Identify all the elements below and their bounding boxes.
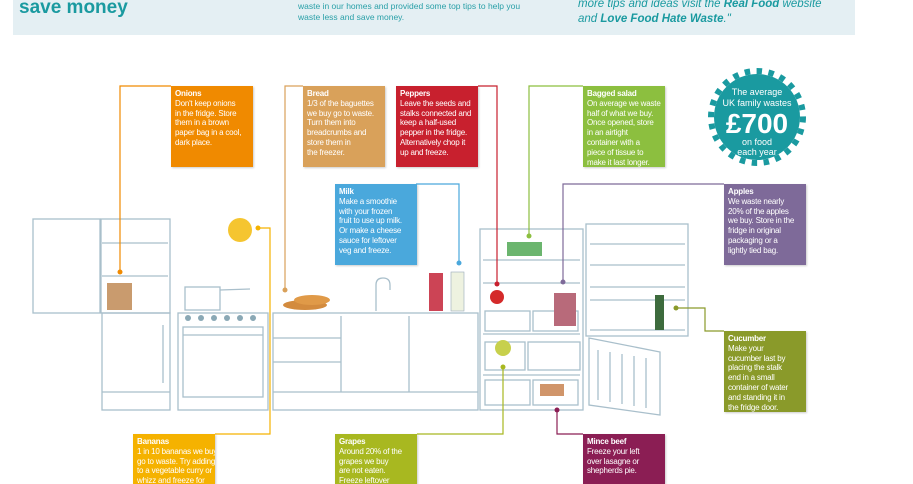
box: peppers: Peppers	[400, 89, 430, 98]
box: bananas: 1 in 10 bananas we buy	[137, 447, 215, 456]
box: onions: Don't keep onions	[175, 99, 235, 108]
box: grapes: grapes we buy	[339, 457, 388, 466]
box: bagged salad: make it last longer.	[587, 158, 650, 167]
quote	[578, 0, 822, 25]
box: bagged salad: On average we waste	[587, 99, 661, 108]
box: milk: Or make a cheese	[339, 226, 401, 235]
box: grapes: are not eaten.	[339, 466, 386, 475]
box: milk: Make a smoothie	[339, 197, 397, 206]
quote: and Love Food Hate Waste."	[578, 13, 731, 25]
box: bread	[303, 86, 385, 167]
box: bagged salad	[583, 86, 665, 167]
box: milk: with your frozen	[339, 207, 392, 216]
box: apples: we buy. Store in the	[728, 216, 794, 225]
box: bananas: Bananas	[137, 437, 169, 446]
box: onions: in the fridge. Store	[175, 109, 236, 118]
box: mince beef: Mince beef	[587, 437, 626, 446]
box: peppers: up and freeze.	[400, 148, 448, 157]
badge: £700: £700	[726, 108, 788, 139]
intro text: waste in our homes and provided some top tips to help you	[298, 1, 520, 11]
box: bread: the freezer.	[307, 148, 345, 157]
box: grapes: Grapes	[339, 437, 365, 446]
badge: £700: on food	[742, 137, 772, 147]
box: mince beef: over lasagne or	[587, 457, 639, 466]
box: peppers: pepper in the fridge.	[400, 128, 467, 137]
box: onions: dark place.	[175, 138, 212, 147]
box: bread: store them in	[307, 138, 351, 147]
box: peppers	[396, 86, 478, 167]
box: milk: sauce for leftover	[339, 236, 397, 245]
header band	[13, 0, 855, 35]
box: cucumber: end in a small	[728, 373, 775, 382]
box: apples: 20% of the apples	[728, 207, 789, 216]
food items	[107, 218, 664, 396]
badge: £700: UK family wastes	[722, 98, 792, 108]
box: mince beef: shepherds pie.	[587, 466, 637, 475]
box: peppers: Alternatively chop it	[400, 138, 465, 147]
box: milk	[335, 184, 417, 265]
box: cucumber: the fridge door.	[728, 403, 778, 412]
box: cucumber	[724, 331, 806, 412]
box: apples: packaging or a	[728, 236, 778, 245]
box: apples: fridge in original	[728, 226, 781, 235]
box: bread: Turn them into	[307, 118, 355, 127]
box: cucumber: Make your	[728, 344, 764, 353]
box: bread: 1/3 of the baguettes	[307, 99, 374, 108]
box: cucumber: and standing it in	[728, 393, 785, 402]
box: bagged salad: in an airtight	[587, 128, 628, 137]
box: grapes: Around 20% of the	[339, 447, 402, 456]
box: onions: paper bag in a cool,	[175, 128, 241, 137]
box: grapes	[335, 434, 417, 484]
box: apples: We waste nearly	[728, 197, 784, 206]
box: apples	[724, 184, 806, 265]
box: cucumber: placing the stalk	[728, 363, 782, 372]
box: onions	[171, 86, 253, 167]
box: bagged salad: piece of tissue to	[587, 148, 643, 157]
box: cucumber: container of water	[728, 383, 788, 392]
box: apples: lightly tied bag.	[728, 246, 778, 255]
intro text: waste less and save money.	[298, 12, 404, 22]
box: onions: Onions	[175, 89, 201, 98]
box: milk: veg and freeze.	[339, 246, 391, 255]
box: bananas: go to waste. Try adding	[137, 457, 215, 466]
box: onions: them in a brown	[175, 118, 229, 127]
box: bagged salad: half of what we buy.	[587, 109, 653, 118]
box: bagged salad: container with a	[587, 138, 640, 147]
box: mince beef: Freeze your left	[587, 447, 639, 456]
box: apples: Apples	[728, 187, 753, 196]
box: bagged salad: Once opened, store	[587, 118, 654, 127]
box: bagged salad: Bagged salad	[587, 89, 637, 98]
box: bananas: to a vegetable curry or	[137, 466, 212, 475]
box: milk: Milk	[339, 187, 354, 196]
box: peppers: keep a half-used	[400, 118, 456, 127]
box: bread: we buy go to waste.	[307, 109, 374, 118]
intro text	[298, 1, 520, 22]
box: bananas	[133, 434, 215, 484]
box: cucumber: cucumber last by	[728, 354, 785, 363]
box: peppers: Leave the seeds and	[400, 99, 470, 108]
badge: £700: The average	[732, 87, 782, 97]
box: bread: breadcrumbs and	[307, 128, 366, 137]
box: mince beef	[583, 434, 665, 484]
box: milk: fruit to use up milk.	[339, 216, 402, 225]
badge: £700: each year	[737, 147, 777, 157]
box: cucumber: Cucumber	[728, 334, 766, 343]
box: bread: Bread	[307, 89, 329, 98]
box: peppers: stalks connected and	[400, 109, 471, 118]
